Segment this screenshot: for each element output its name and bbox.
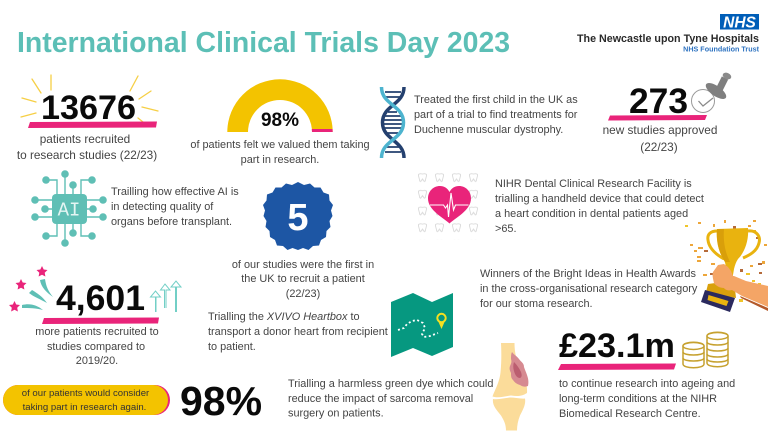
text: NIHR Dental Clinical Research Facility is (495, 178, 692, 190)
text: XVIVO Heartbox: Trialling the XVIVO Heartbox to (208, 311, 360, 323)
arm and fist (713, 264, 768, 307)
highlight underline (558, 364, 676, 370)
stat: 5 first in the UK (232, 182, 374, 300)
number: 273: 273 (629, 81, 688, 121)
caption: more patients recruited to (35, 326, 159, 338)
text: green dye sarcoma: reduce the impact of sarcoma removal (288, 393, 473, 405)
text: AI organ quality: in detecting quality of (111, 201, 214, 213)
pill text: of our patients would consider (22, 388, 150, 399)
icon: AI circuit chip: AI (58, 200, 80, 222)
text: XVIVO Heartbox (208, 311, 388, 353)
highlight underline (608, 115, 707, 120)
stat: 4,601 more patients: studies compared to (47, 341, 145, 353)
NHS trust logo: NHS Foundation Trust (683, 44, 760, 54)
gauge value: 98% (261, 110, 299, 131)
caption: new studies approved (603, 123, 717, 137)
stat: 23.1m funding (558, 327, 735, 420)
stat: 23.1m funding: Biomedical Research Centre. (559, 408, 701, 420)
text: AI organ quality: Trailling how effective AI is (111, 186, 239, 198)
text: Bright Ideas award: in the cross-organisational research category (480, 283, 698, 295)
stat: 5 first in the UK: (22/23) (286, 288, 320, 300)
icon: hand holding trophy (685, 220, 768, 312)
text: Bright Ideas award: for our stoma research. (480, 298, 593, 310)
NHS trust logo: The Newcastle upon Tyne Hospitals (577, 33, 759, 45)
icon: approval stamp (692, 71, 732, 112)
panel: dental heart device: trialling a handheld device that could detect (495, 193, 704, 205)
stat: 273 new studies (603, 71, 732, 154)
highlight underline (42, 318, 159, 324)
stat: 4,601 more patients: 2019/20. (76, 355, 118, 367)
text: AI organ quality (111, 186, 239, 228)
stat: 273 new studies: (22/23) (640, 140, 678, 154)
caption: of patients felt we valued them taking (190, 139, 370, 151)
icon: green map with route (391, 293, 453, 357)
text: Bright Ideas award (480, 268, 698, 310)
callout: 98% would take part again (3, 378, 262, 424)
tibia (493, 398, 525, 430)
caption: of our studies were the first in (232, 259, 374, 271)
stat: 98% gauge: part in research. (241, 154, 319, 166)
panel: dental heart device: >65. (495, 223, 516, 235)
icon: leg bone with sarcoma (492, 343, 528, 430)
stat: 5 first in the UK: the UK to recruit a patient (241, 273, 365, 285)
text: XVIVO Heartbox: transport a donor heart from recipient (208, 326, 388, 338)
text: green dye sarcoma: Trialling a harmless green dye which could (288, 378, 493, 390)
stat: 98% gauge (190, 79, 370, 166)
text: Duchenne trial: Treated the first child in the UK as (414, 94, 578, 106)
text: green dye sarcoma (288, 378, 493, 420)
icon: yellow sunburst rays (21, 75, 158, 122)
number: 23.1m: £23.1m (559, 327, 675, 365)
number: 13676: 13676 (41, 89, 136, 127)
highlight underline (28, 122, 157, 128)
icon: stars and streaks (9, 266, 53, 312)
text: Bright Ideas award: Winners of the Bright Ideas in Health Awards (480, 268, 696, 280)
stat: 4,601 more patients (9, 266, 181, 367)
icon: coin stacks (683, 332, 728, 368)
text: Duchenne trial: Duchenne muscular dystrophy. (414, 124, 563, 136)
icon: AI circuit chip (31, 170, 107, 247)
text: Duchenne trial: part of a trial to find treatments for (414, 109, 578, 121)
trophy (708, 231, 759, 259)
trophy base (701, 290, 735, 312)
number: 4,601: 4,601 (56, 278, 145, 318)
stat: 23.1m funding: long-term conditions at the NIHR (559, 393, 717, 405)
text: green dye sarcoma: surgery on patients. (288, 408, 384, 420)
confetti (685, 220, 767, 302)
stat: 13676 patients recruited (17, 75, 158, 162)
number: 98%: 98% (180, 378, 262, 424)
icon: heart with pulse (428, 186, 471, 224)
stat: 13676 patients recruited: to research studies (22/23) (17, 148, 157, 162)
icon: DNA helix (382, 87, 404, 158)
caption: to continue research into ageing and (559, 378, 735, 390)
icon: blue rosette badge (263, 182, 333, 250)
NHS trust logo (577, 14, 760, 54)
panel: dental heart device: a heart condition in dental patients aged (495, 208, 688, 220)
text: XVIVO Heartbox: to patient. (208, 341, 256, 353)
tumour (510, 352, 528, 387)
icon: rising arrows (150, 281, 181, 312)
caption: patients recruited (40, 132, 130, 146)
icon: blue rosette badge: 5 (287, 197, 309, 239)
text: Duchenne trial (414, 94, 578, 136)
gauge chart (227, 79, 333, 132)
NHS trust logo: NHS (723, 14, 757, 32)
callout: 98% would take part again: taking part in research again. (23, 402, 146, 413)
text: AI organ quality: organs before transplant. (111, 216, 232, 228)
panel: dental heart device (415, 168, 704, 240)
femur (492, 343, 527, 397)
pill (3, 385, 170, 415)
tooth pattern background (415, 168, 485, 240)
title: International Clinical Trials Day 2023 (17, 27, 510, 59)
